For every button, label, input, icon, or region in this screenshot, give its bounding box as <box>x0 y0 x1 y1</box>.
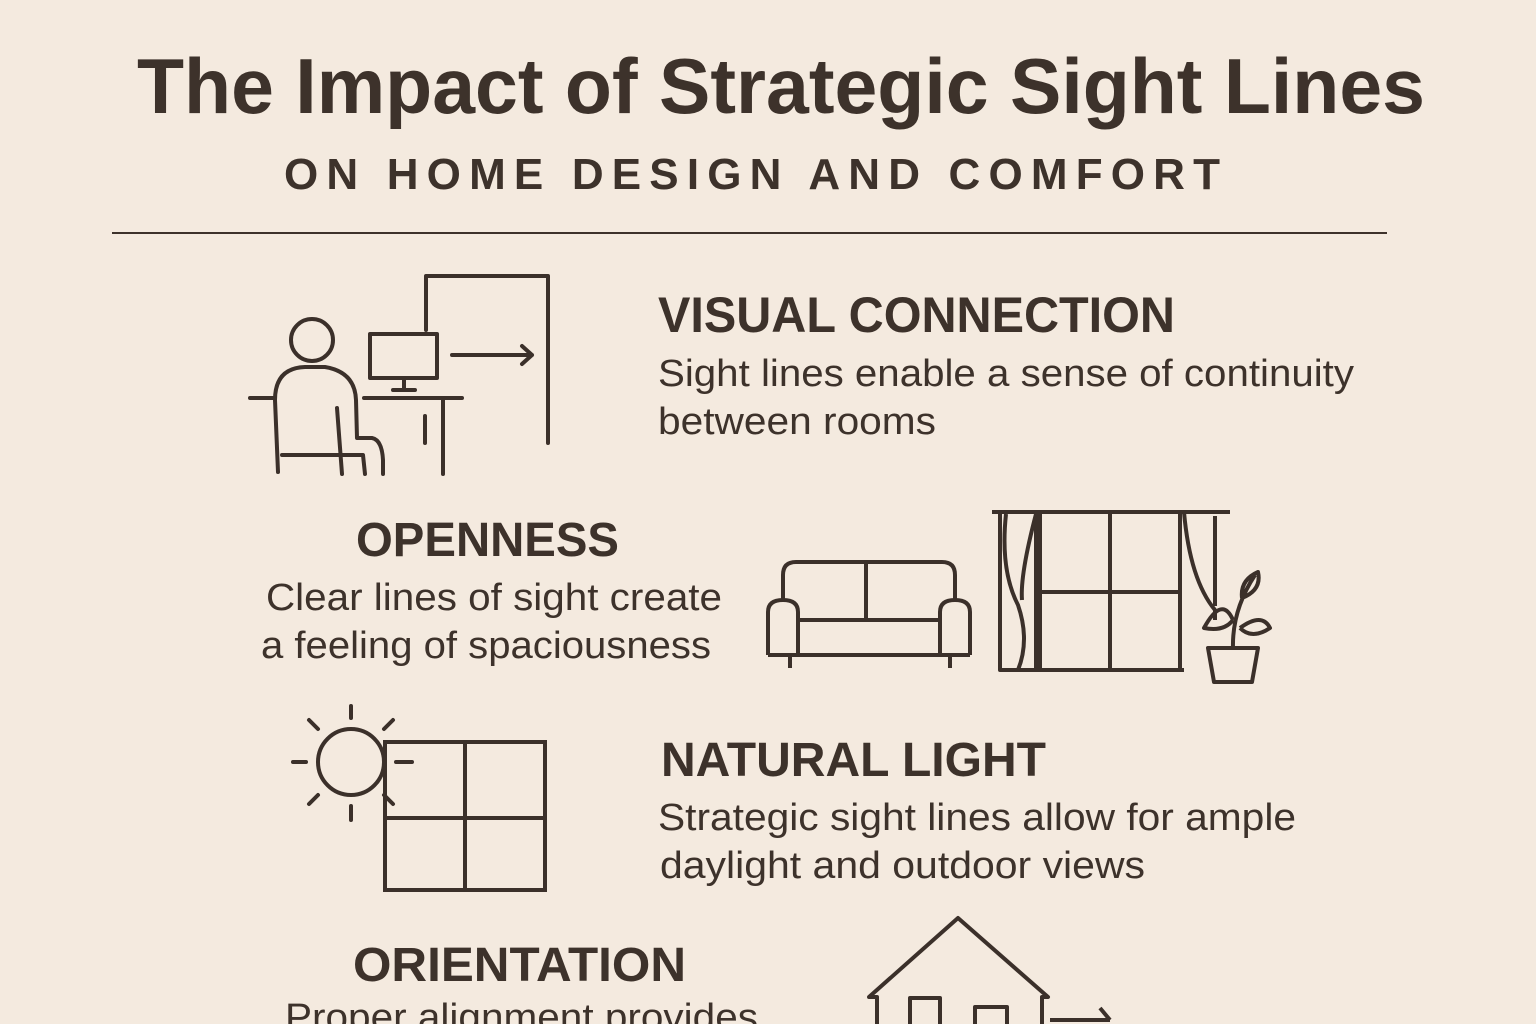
text: openness body <box>261 577 722 667</box>
text: visual connection body: between rooms <box>658 401 936 443</box>
heading: visual connection: VISUAL CONNECTION <box>658 287 1175 343</box>
text: natural light body <box>658 797 1296 887</box>
icon: person at desk looking through doorway <box>250 276 548 474</box>
text: openness body: a feeling of spaciousness <box>261 625 711 667</box>
heading: openness: OPENNESS <box>356 514 619 567</box>
heading: orientation: ORIENTATION <box>353 939 686 992</box>
icon: sofa <box>768 562 970 668</box>
text: natural light body: daylight and outdoor views <box>660 845 1145 887</box>
subtitle: ON HOME DESIGN AND COMFORT <box>284 150 1220 199</box>
heading: natural light: NATURAL LIGHT <box>661 734 1046 787</box>
icon: window with curtains and plant <box>992 512 1270 682</box>
text: openness body: Clear lines of sight create <box>266 577 722 619</box>
text: visual connection body <box>658 353 1354 443</box>
icon: house with arrow <box>869 918 1110 1024</box>
text: visual connection body: Sight lines enable a sense of continuity <box>658 353 1354 395</box>
text: natural light body: Strategic sight lines allow for ample <box>658 797 1296 839</box>
icon: sun and window <box>293 706 545 890</box>
title: The Impact of Strategic Sight Lines <box>137 42 1425 130</box>
